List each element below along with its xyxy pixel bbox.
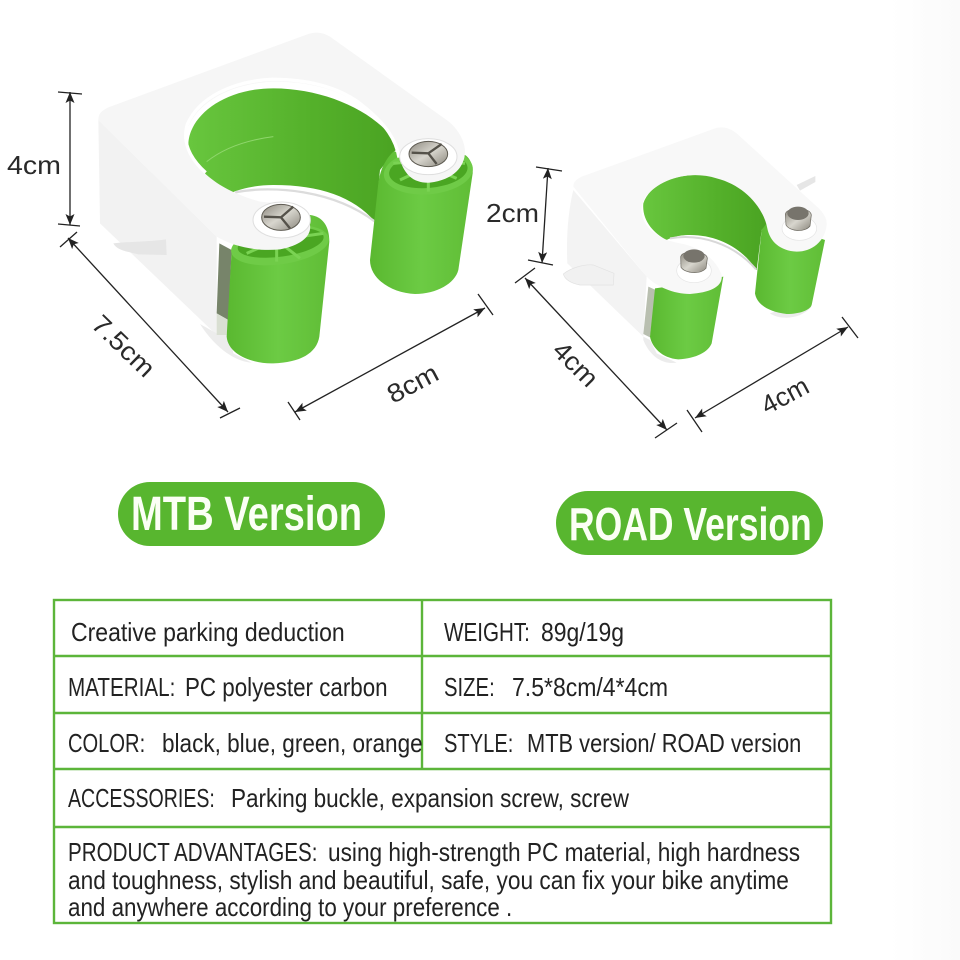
cell: material: [68, 672, 388, 702]
cell: size: [444, 672, 668, 702]
cell: accessories: Parking buckle, expansion screw, screw: [231, 783, 629, 813]
dimension: ROAD width 4cm: [687, 317, 858, 432]
cell: style: MTB version/ ROAD version: [527, 728, 801, 758]
cell: color: black, blue, green, orange: [162, 728, 423, 758]
cell: size: SIZE:: [444, 672, 495, 702]
dimension: MTB width 8cm: [288, 294, 493, 420]
cell: accessories: ACCESSORIES:: [68, 783, 215, 813]
cell: weight: [444, 617, 624, 647]
cell: material: MATERIAL:: [68, 672, 175, 702]
cell: weight: 89g/19g: [541, 617, 624, 647]
ROAD clamp: [563, 127, 827, 363]
cell: product advantages: and anywhere according to your preference .: [68, 892, 512, 922]
background right strip: [890, 0, 960, 960]
cell: product advantages: PRODUCT ADVANTAGES:: [68, 837, 317, 867]
cell: weight: WEIGHT:: [444, 617, 530, 647]
dimension: ROAD height 2cm: 2cm: [486, 198, 539, 228]
dimension: MTB width 8cm: 8cm: [382, 357, 443, 409]
product illustrations: [7, 33, 858, 438]
dimension: MTB height 4cm: [7, 92, 82, 226]
cell: creative parking: Creative parking deduction: [71, 617, 345, 647]
dimension: ROAD depth 4cm: 4cm: [547, 335, 605, 393]
cell: product advantages: and toughness, stylish and beautiful, safe, you can fix your bike anytime: [68, 865, 789, 895]
cell: material: PC polyester carbon: [185, 672, 388, 702]
cell: size: 7.5*8cm/4*4cm: [512, 672, 668, 702]
MTB clamp: [98, 33, 475, 363]
dimension: MTB depth 7.5cm: 7.5cm: [86, 309, 161, 383]
dimension: ROAD depth 4cm: [515, 268, 677, 438]
dimension: MTB height 4cm: 4cm: [7, 150, 61, 180]
label: MTB Version: MTB Version: [131, 488, 362, 541]
dimension: ROAD height 2cm: [486, 167, 562, 265]
dimension: ROAD width 4cm: 4cm: [756, 370, 814, 420]
cell: style: STYLE:: [444, 728, 513, 758]
cell: product advantages: [68, 837, 800, 922]
dimension: MTB depth 7.5cm: [60, 232, 240, 418]
cell: color: COLOR:: [68, 728, 145, 758]
cell: product advantages: using high-strength PC material, high hardness: [328, 837, 800, 867]
label: ROAD Version: ROAD Version: [569, 498, 812, 550]
